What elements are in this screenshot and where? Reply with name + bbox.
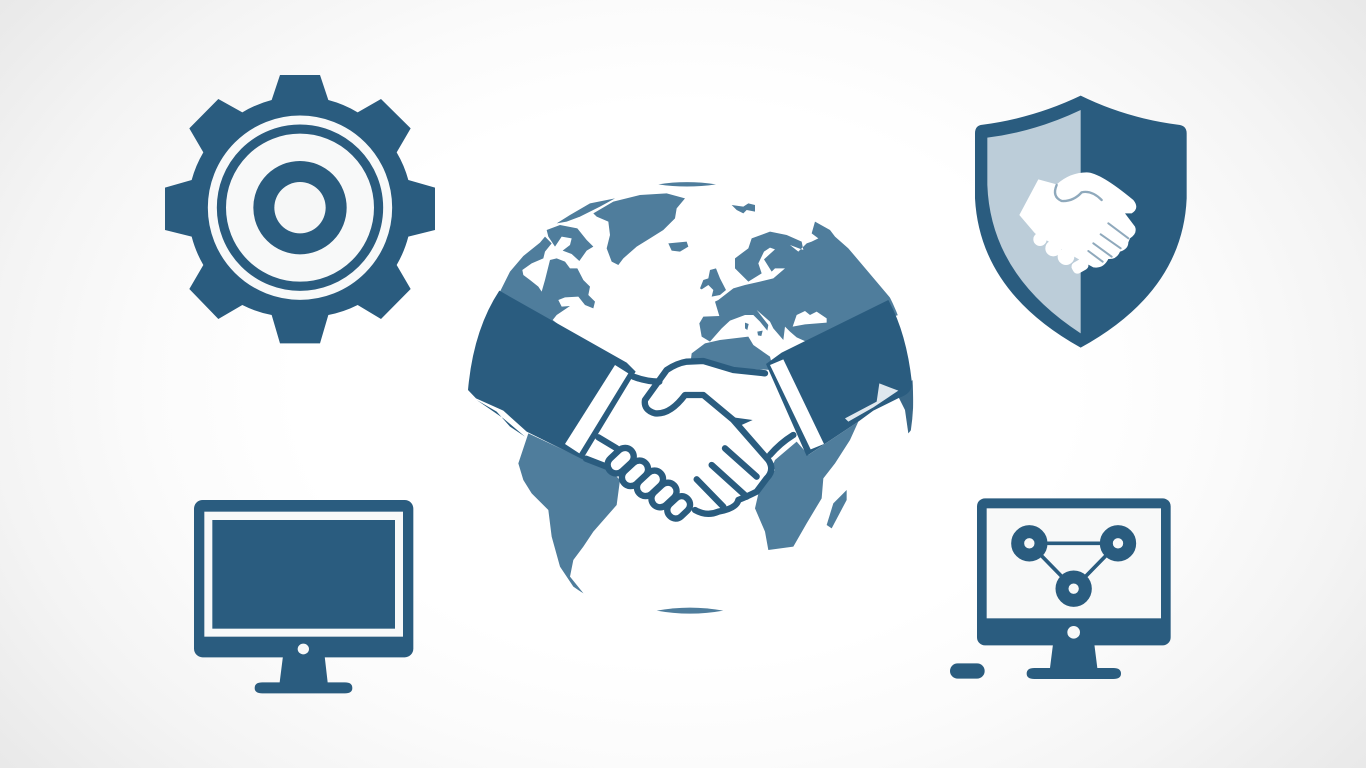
south america — [518, 433, 620, 594]
handshake white fill — [585, 360, 793, 518]
keyboard pill — [950, 663, 985, 679]
north africa — [690, 337, 773, 370]
handshake — [586, 361, 793, 522]
finger lines — [697, 448, 757, 507]
monitor stand — [1027, 642, 1121, 679]
globe with handshake — [467, 174, 914, 620]
left sleeve — [468, 291, 636, 459]
sleeve highlight — [845, 383, 898, 422]
network nodes — [1018, 532, 1130, 600]
arabia and india — [899, 380, 914, 434]
shield light half — [987, 110, 1081, 333]
wrist lines — [586, 377, 793, 467]
globe backdrop — [467, 174, 913, 620]
sicily and sardinia — [745, 323, 763, 336]
north pole cap — [658, 182, 716, 186]
madagascar — [827, 490, 847, 528]
left cuff — [565, 365, 628, 453]
monitor screen — [212, 520, 395, 629]
icon: blank monitor — [194, 500, 413, 693]
southern africa — [755, 422, 858, 550]
monitor frame — [977, 498, 1171, 645]
right sleeve — [766, 300, 912, 456]
iceland — [668, 242, 688, 252]
monitor stand — [255, 653, 352, 693]
right cuff — [770, 359, 824, 449]
icon: shield with handshake — [975, 96, 1187, 348]
eurasia — [699, 222, 903, 343]
shield body — [975, 96, 1187, 348]
south pole cap — [657, 608, 723, 614]
north america group — [500, 193, 688, 333]
top hand — [645, 361, 771, 514]
uk — [700, 268, 726, 297]
monitor frame — [194, 500, 413, 657]
clasped fingers — [604, 444, 693, 522]
greenland — [593, 193, 685, 265]
europe and asia group — [690, 203, 903, 370]
central america — [477, 400, 525, 437]
white handshake — [1019, 172, 1136, 275]
icon: monitor with network diagram — [950, 498, 1171, 679]
thumb barb — [733, 417, 753, 426]
icon: gear — [165, 75, 435, 343]
svalbard — [732, 203, 755, 213]
continents — [477, 182, 914, 614]
